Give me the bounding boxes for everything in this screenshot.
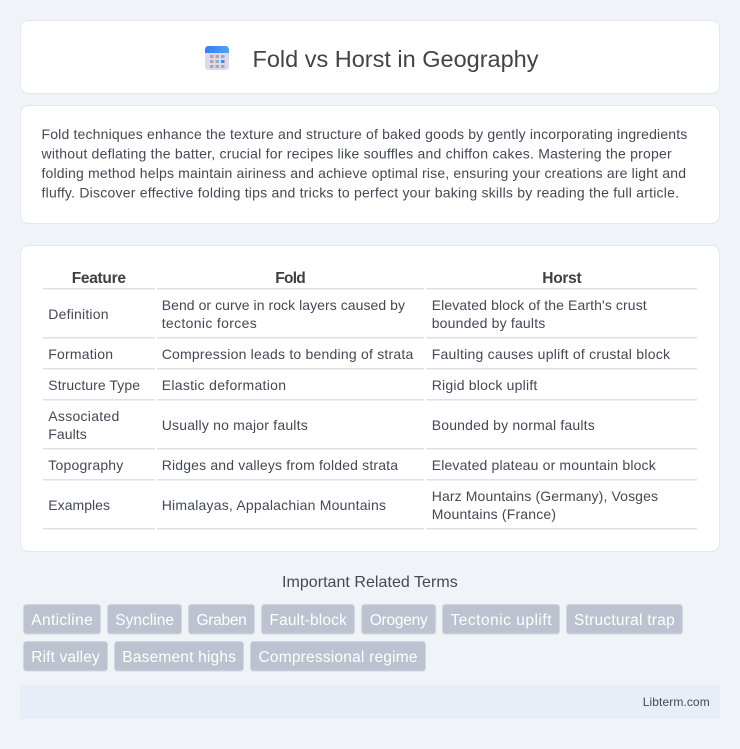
tag: Anticline bbox=[24, 604, 100, 634]
panel: comparison table bbox=[20, 246, 720, 552]
table row: topography: Ridges and valleys from folded strata bbox=[162, 457, 398, 473]
footer bbox=[20, 685, 720, 719]
table row: associated faults: Usually no major faults bbox=[162, 417, 308, 433]
table header row: Feature bbox=[72, 270, 126, 287]
table row: formation: Compression leads to bending of strata bbox=[162, 346, 414, 362]
tag: Fault-block bbox=[262, 604, 354, 634]
table row: structure type bbox=[43, 377, 697, 400]
table row: associated faults: Bounded by normal faults bbox=[432, 417, 595, 433]
table row: formation: Formation bbox=[48, 346, 113, 362]
table row: examples: Examples bbox=[48, 497, 110, 513]
tag: Syncline bbox=[108, 604, 182, 634]
title: Fold vs Horst in Geography bbox=[252, 46, 539, 72]
tag: Rift valley bbox=[24, 642, 108, 671]
table row: definition bbox=[43, 297, 697, 338]
table row: topography bbox=[43, 457, 697, 480]
table header row: Horst bbox=[542, 270, 582, 287]
icon: calendar bbox=[205, 46, 229, 70]
tag: Graben: Graben bbox=[196, 612, 247, 629]
text block: intro paragraph bbox=[40, 126, 687, 200]
tag: Structural trap bbox=[566, 604, 682, 634]
tag: Tectonic uplift bbox=[442, 604, 560, 634]
table row: topography: Topography bbox=[48, 457, 123, 473]
text block: intro paragraph: fluffy. Discover effective folding tips and tricks to perfect your baking skills by reading the full article. bbox=[42, 184, 679, 200]
table header row bbox=[43, 270, 697, 290]
table row: formation bbox=[43, 346, 697, 370]
text block: intro paragraph: without deflating the batter, crucial for recipes like souffles and chiffon cakes. Mastering the proper bbox=[40, 146, 672, 162]
tag: Structural trap: Structural trap bbox=[574, 612, 675, 629]
table row: formation: Faulting causes uplift of crustal block bbox=[432, 346, 671, 362]
table row: associated faults: Associated bbox=[48, 408, 119, 424]
text block: intro paragraph: folding method helps maintain airiness and achieve optimal rise, ensuring your creations are light and bbox=[42, 165, 686, 181]
tag cloud: related terms bbox=[24, 604, 682, 671]
tag: Syncline: Syncline bbox=[115, 612, 174, 629]
table row: examples: Mountains (France) bbox=[432, 506, 556, 522]
tag: Compressional regime bbox=[250, 642, 426, 671]
table row: definition: Definition bbox=[48, 306, 108, 322]
table row: definition: Bend or curve in rock layers caused by bbox=[162, 297, 405, 313]
table row: examples: Himalayas, Appalachian Mountains bbox=[162, 497, 386, 513]
tag: Orogeny bbox=[362, 604, 436, 634]
heading: related terms: Important Related Terms bbox=[282, 574, 458, 591]
table row: definition: tectonic forces bbox=[162, 315, 257, 331]
footer credit: Libterm.com bbox=[643, 695, 710, 709]
table row: examples: Harz Mountains (Germany), Vosges bbox=[432, 488, 658, 504]
text block: intro paragraph: Fold techniques enhance the texture and structure of baked goods by gently incorporating ingredients bbox=[42, 126, 687, 142]
table row: structure type: Structure Type bbox=[48, 377, 140, 393]
panel: intro text bbox=[20, 106, 720, 224]
tag: Basement highs: Basement highs bbox=[122, 649, 236, 666]
tag: Tectonic uplift: Tectonic uplift bbox=[450, 612, 552, 629]
table row: definition: Elevated block of the Earth's crust bbox=[432, 297, 647, 313]
tag: Rift valley: Rift valley bbox=[31, 649, 100, 666]
table row: associated faults bbox=[43, 408, 697, 450]
table row: structure type: Elastic deformation bbox=[162, 377, 286, 393]
table row: definition: bounded by faults bbox=[432, 315, 545, 331]
tag: Anticline: Anticline bbox=[31, 612, 93, 629]
table header row: Fold bbox=[275, 270, 306, 287]
panel: header bbox=[20, 20, 720, 94]
tag: Graben bbox=[188, 604, 254, 634]
table row: topography: Elevated plateau or mountain block bbox=[432, 457, 657, 473]
tag: Fault-block: Fault-block bbox=[270, 612, 347, 629]
table row: structure type: Rigid block uplift bbox=[432, 377, 537, 393]
tag: Compressional regime: Compressional regime bbox=[258, 649, 418, 666]
tag: Basement highs bbox=[114, 642, 244, 671]
table row: examples bbox=[43, 488, 697, 530]
table row: associated faults: Faults bbox=[48, 426, 87, 442]
tag: Orogeny: Orogeny bbox=[370, 612, 428, 629]
